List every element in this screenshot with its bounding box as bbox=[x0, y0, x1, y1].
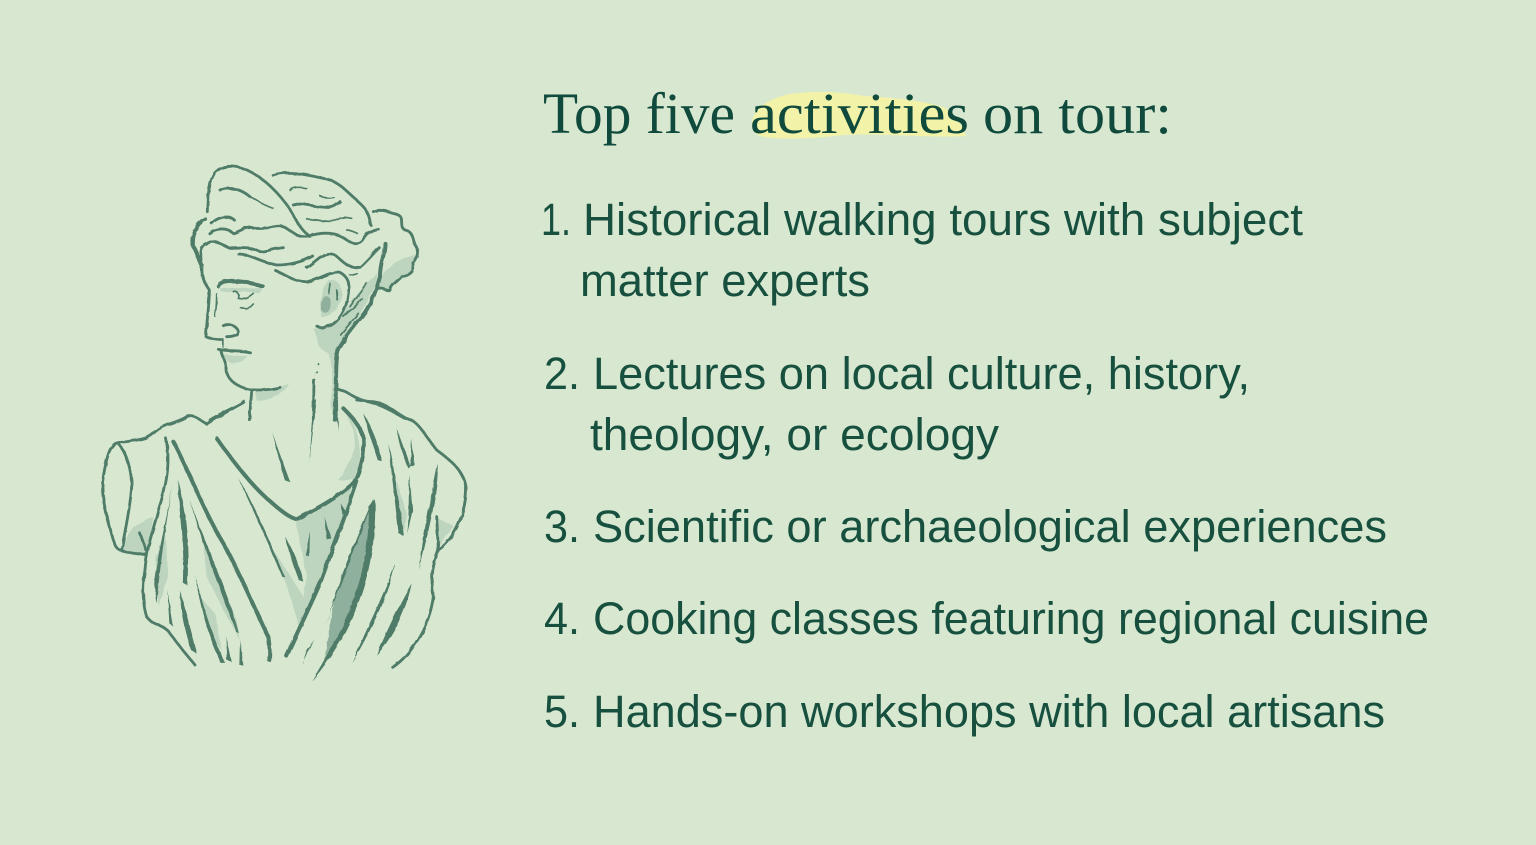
list item 4: Cooking classes featuring regional cuisine bbox=[593, 593, 1429, 644]
title: Top five bbox=[543, 81, 735, 146]
list item 3: 3. bbox=[544, 501, 580, 552]
bust head and hair bbox=[192, 166, 418, 420]
title: on tour: bbox=[983, 81, 1172, 146]
list item 4: 4. bbox=[544, 593, 580, 644]
highlight brush stroke bbox=[752, 92, 966, 139]
list item 3: Scientific or archaeological experiences bbox=[593, 501, 1387, 552]
list item 1: matter experts bbox=[580, 255, 870, 306]
list item 2: 2. bbox=[544, 348, 580, 399]
list item 2: theology, or ecology bbox=[590, 409, 1000, 460]
list item 5: Hands-on workshops with local artisans bbox=[593, 686, 1385, 737]
list item 1: 1. bbox=[541, 194, 571, 245]
title bbox=[543, 81, 1172, 146]
list item 1: Historical walking tours with subject bbox=[583, 194, 1304, 245]
list item 2 bbox=[544, 348, 1250, 460]
illustration: classical bust bbox=[102, 166, 466, 682]
title: activities bbox=[750, 81, 969, 146]
bust torso and drapery bbox=[102, 400, 466, 682]
list item 1 bbox=[541, 194, 1304, 306]
list item 2: Lectures on local culture, history, bbox=[593, 348, 1250, 399]
list item 5: 5. bbox=[544, 686, 580, 737]
